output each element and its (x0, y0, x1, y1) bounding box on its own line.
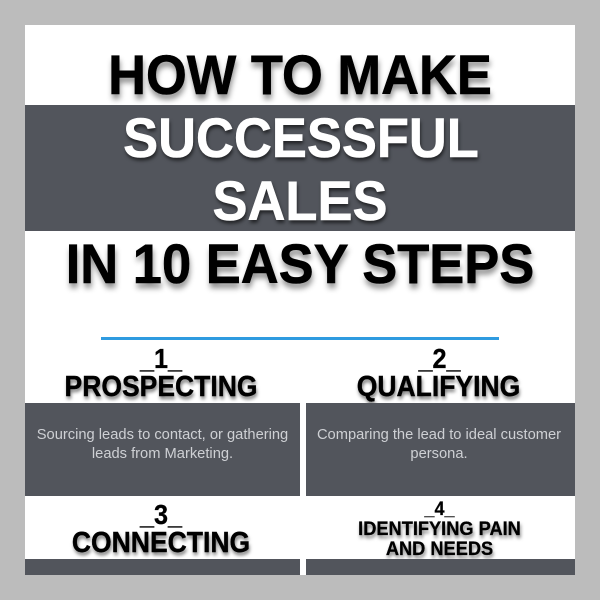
panel: step 2 description (306, 403, 575, 496)
step 3 heading: CONNECTING (72, 527, 250, 559)
step 3 number: _3_ (140, 499, 182, 530)
step 2 text: persona. (410, 446, 468, 462)
title: successful: SUCCESSFUL (123, 106, 479, 169)
step 2 text (317, 427, 561, 462)
title band (25, 105, 575, 231)
title: sales: SALES (213, 168, 387, 232)
step 2 heading: QUALIFYING (357, 371, 520, 403)
step 1 text: Sourcing leads to contact, or gathering (37, 427, 288, 443)
title: how to make: HOW TO MAKE (108, 42, 492, 106)
step 1 number: _1_ (140, 343, 182, 374)
step 1 heading: PROSPECTING (65, 371, 257, 403)
panel: step 1 description (25, 403, 300, 496)
blue divider (101, 337, 499, 340)
step 2 text: Comparing the lead to ideal customer (317, 427, 561, 443)
step 4 heading: AND NEEDS (386, 538, 493, 560)
panel: step 3 description (25, 559, 300, 575)
step 4 number: _4_ (424, 499, 455, 520)
step 4 heading (358, 518, 524, 560)
step 4 heading: IDENTIFYING PAIN (358, 518, 521, 540)
title: in 10 easy steps: IN 10 EASY STEPS (66, 232, 534, 294)
step 1 text (37, 427, 288, 462)
panel: step 4 description (306, 559, 575, 575)
step 1 text: leads from Marketing. (92, 446, 233, 462)
step 2 number: _2_ (418, 343, 461, 374)
